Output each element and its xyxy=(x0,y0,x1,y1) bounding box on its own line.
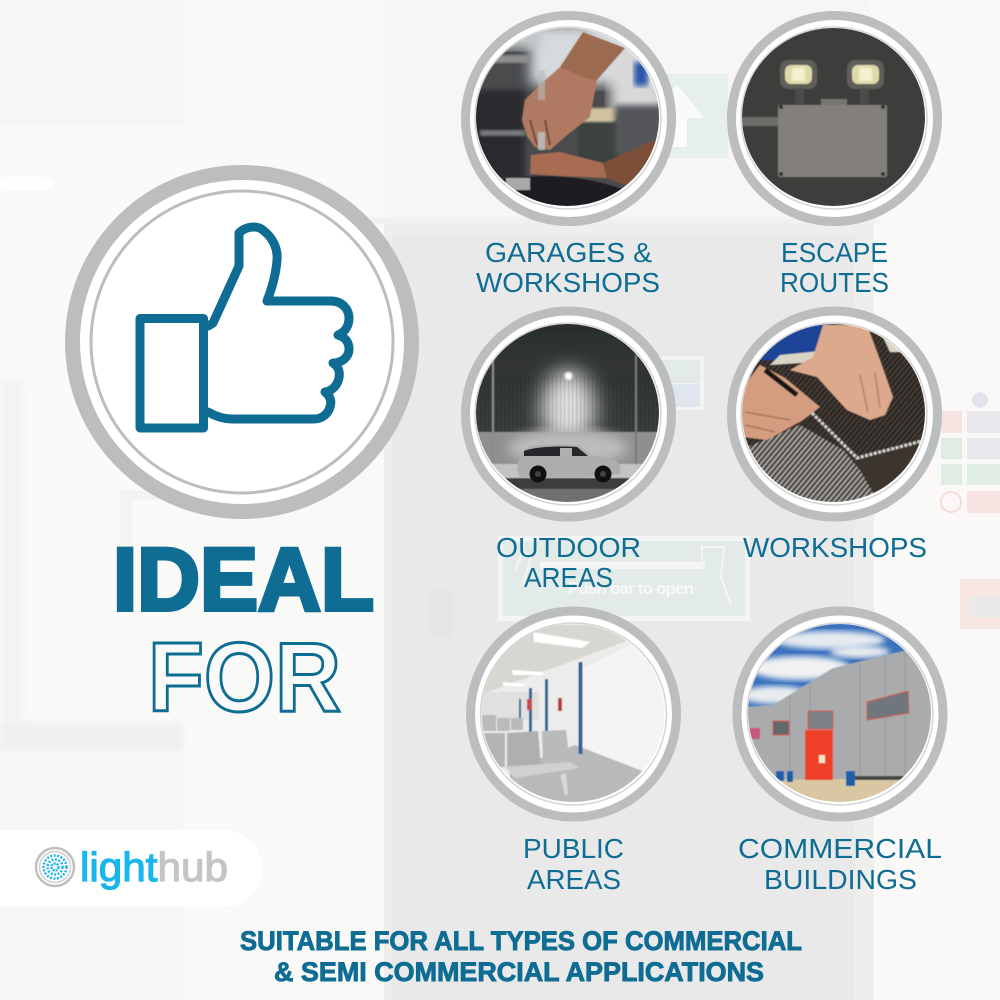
panel: garages and workshops xyxy=(466,16,672,298)
label: outdoor areas xyxy=(496,532,641,593)
label: commercial buildings xyxy=(738,833,942,895)
panel: escape routes xyxy=(732,16,938,298)
panel: workshops xyxy=(732,311,938,563)
icon: lighthub concentric dots xyxy=(36,848,74,886)
label: public areas: PUBLIC xyxy=(523,833,624,864)
panel: public areas xyxy=(470,611,676,895)
label: public areas xyxy=(523,833,624,895)
label: garages and workshops xyxy=(476,237,660,298)
label: escape routes xyxy=(780,237,889,298)
label: commercial buildings: BUILDINGS xyxy=(764,864,917,895)
label: workshops: WORKSHOPS xyxy=(743,532,927,563)
label: outdoor areas: AREAS xyxy=(524,562,613,593)
photo: twin-head emergency light xyxy=(732,16,938,222)
footer text xyxy=(240,926,802,987)
label: garages and workshops: WORKSHOPS xyxy=(476,267,660,298)
photo: mechanic hands in engine bay xyxy=(466,16,672,222)
label: escape routes: ESCAPE xyxy=(781,237,888,268)
label: escape routes: ROUTES xyxy=(780,267,889,298)
label: garages and workshops: GARAGES & xyxy=(485,237,652,268)
label: outdoor areas: OUTDOOR xyxy=(496,532,641,563)
label: public areas: AREAS xyxy=(527,864,621,895)
heading: FOR (outlined): FOR xyxy=(148,622,341,732)
photo: white waiting room with seats xyxy=(470,611,676,817)
icon: thumbs up xyxy=(140,227,349,428)
photo: grey industrial building with red door xyxy=(737,611,943,817)
background photo: washed-out corridor: Push bar to open xyxy=(568,579,694,598)
photo: hands laying carbon fibre xyxy=(732,311,938,517)
faded safety signs are part of the backdrop xyxy=(941,392,1000,629)
heading: IDEAL: IDEAL xyxy=(113,529,374,629)
panel: commercial buildings xyxy=(737,611,943,895)
wordmark: lighthub: lighthub xyxy=(80,844,228,890)
panel: outdoor areas xyxy=(466,311,672,593)
footer text: & SEMI COMMERCIAL APPLICATIONS xyxy=(274,957,764,987)
photo: car under wall light at night xyxy=(466,311,672,517)
main circle with thumbs-up icon xyxy=(72,172,412,512)
footer text: SUITABLE FOR ALL TYPES OF COMMERCIAL xyxy=(240,926,802,956)
label: commercial buildings: COMMERCIAL xyxy=(738,833,942,864)
logo: lighthub pill xyxy=(0,830,262,907)
